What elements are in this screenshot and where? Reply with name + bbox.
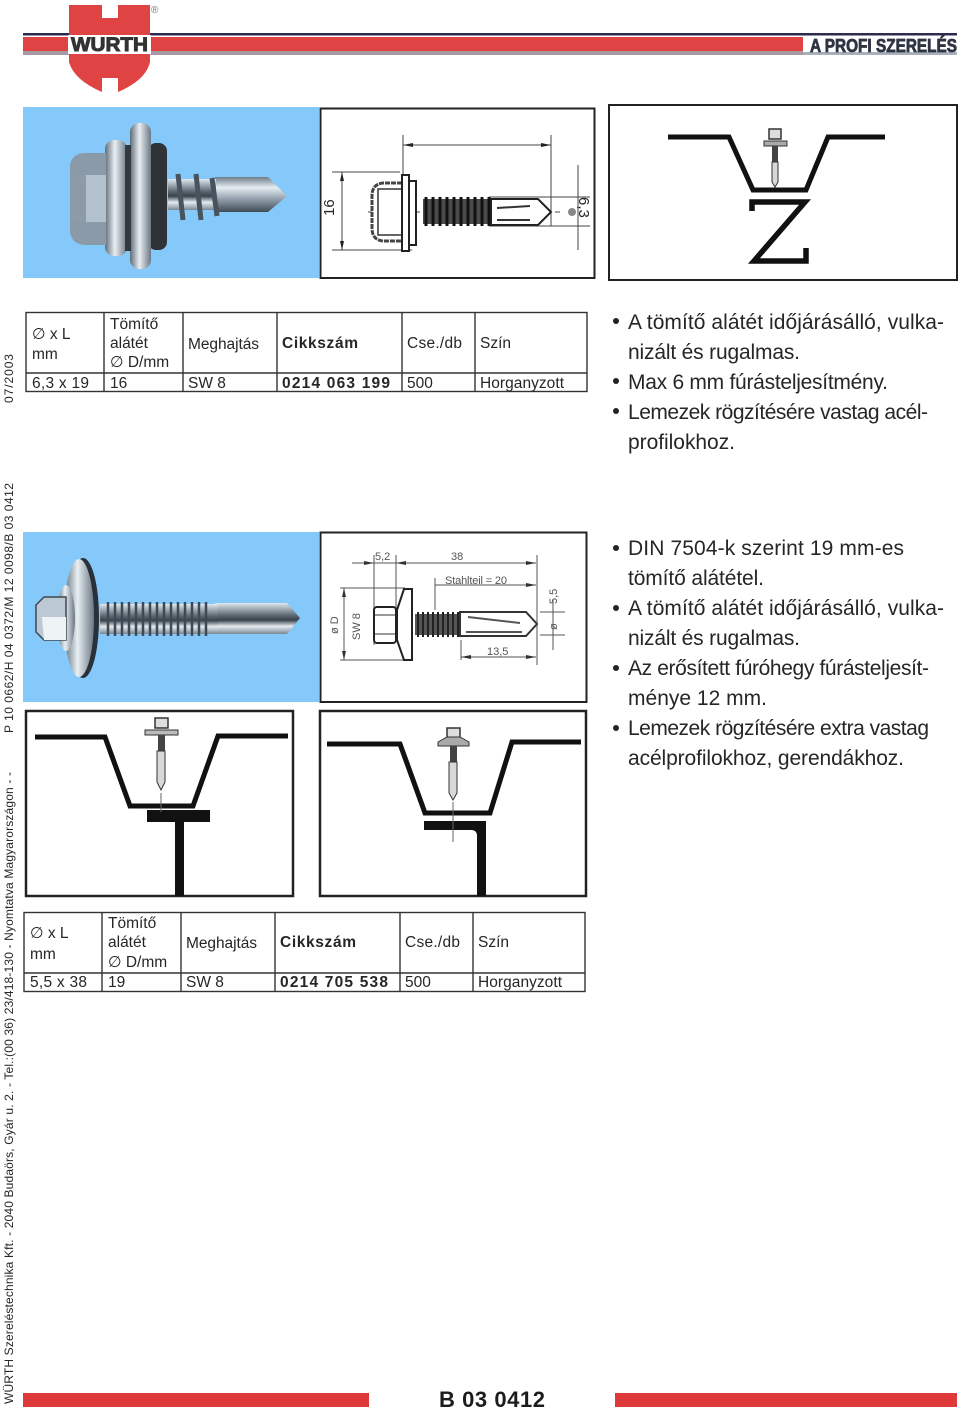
thread: [100, 602, 218, 636]
table 1: Tömítő: [110, 316, 158, 333]
header band: [23, 33, 957, 56]
drill tip: [460, 612, 537, 636]
diagram: T profile mounting: [26, 711, 293, 896]
label: 6,3: 6,3: [575, 197, 592, 218]
bullet list 2: ménye 12 mm.: [628, 687, 767, 710]
logo: Würth shield: WURTH: [71, 35, 148, 56]
table 1: ∅ D/mm: [110, 353, 169, 371]
diagram: L profile mounting: [320, 711, 586, 896]
bullet list 2: A tömítő alátét időjárásálló, vulka-: [628, 597, 944, 620]
head: [374, 607, 396, 643]
bullet list 1: nizált és rugalmas.: [628, 341, 800, 364]
small screw: [145, 718, 178, 812]
bullet list 2: Lemezek rögzítésére extra vastag: [628, 717, 929, 740]
table 1: Cse./db: [407, 335, 462, 352]
head outline: [372, 183, 402, 241]
bullet list 1: profilokhoz.: [628, 431, 735, 454]
table 2: Szín: [478, 934, 509, 951]
bullet list 1: A tömítő alátét időjárásálló, vulka-: [628, 311, 944, 334]
drill shank: [215, 603, 300, 634]
table 2: Horganyzott: [478, 974, 563, 991]
footer: [23, 1387, 957, 1412]
technical drawing: screw 1 dimensions: [320, 108, 594, 278]
dimension labels: Stahlteil = 20: [445, 575, 507, 587]
label: 16: 16: [321, 199, 338, 216]
logo: Würth shield: ®: [151, 5, 159, 16]
dimension labels: 5,5: [548, 589, 560, 604]
table 1: ∅ x L: [32, 325, 71, 343]
table 2: 19: [108, 974, 125, 991]
table 2: ∅ D/mm: [108, 953, 167, 971]
table 2: mm: [30, 946, 56, 963]
table 1: 0214 063 199: [282, 375, 390, 392]
table 2: SW 8: [186, 974, 224, 991]
bullet list 2: [613, 537, 944, 770]
table 1: SW 8: [188, 375, 226, 392]
sidebar vertical text: 07/2003: [2, 354, 16, 403]
washers: [402, 175, 409, 251]
rubber seal: [148, 143, 167, 250]
logo: Würth shield: [68, 5, 159, 92]
dimension labels: ø: [548, 623, 560, 630]
sidebar vertical text: [2, 354, 16, 1404]
sidebar vertical text: WÜRTH Szereléstechnika Kft. - 2040 Budaörs, Gyár u. 2. - Tel.:(00 36) 23/418-130 - Nyomtatva Magyarországon - -: [2, 772, 16, 1404]
photo: screw 2 on blue: [23, 532, 319, 702]
bullet list 1: Max 6 mm fúrásteljesítmény.: [628, 371, 888, 394]
washer: [397, 589, 412, 660]
dimension labels: 13,5: [487, 646, 508, 658]
table 1: 16: [110, 375, 127, 392]
table 2: alátét: [108, 934, 147, 951]
screw tip and shank: [215, 177, 287, 212]
dimension labels: 5,2: [375, 551, 390, 563]
drill tip: [491, 199, 551, 225]
collar: [57, 585, 75, 651]
table 1: Meghajtás: [188, 336, 259, 353]
table 2: 500: [405, 974, 431, 991]
technical drawing: screw 2 dimensions: [320, 532, 586, 702]
dimension labels: SW 8: [351, 613, 363, 640]
table 1: Szín: [480, 335, 511, 352]
bullet list 2: DIN 7504-k szerint 19 mm-es: [628, 537, 904, 560]
dimension labels: [329, 551, 560, 658]
table 1: alátét: [110, 335, 149, 352]
thread: [168, 174, 217, 220]
dimension labels: 38: [451, 551, 463, 563]
table 1: mm: [32, 346, 58, 363]
table 1: [26, 312, 587, 392]
page code: B 03 0412: [439, 1387, 545, 1412]
hex head: [70, 153, 106, 245]
table 2: [24, 912, 585, 992]
photo: screw 1 on blue: [23, 107, 319, 278]
hex head: [36, 597, 66, 640]
bullet list 2: Az erősített fúróhegy fúrásteljesít-: [628, 657, 929, 680]
table 1: 500: [407, 375, 433, 392]
bullet list 2: acélprofilokhoz, gerendákhoz.: [628, 747, 904, 770]
table 1: Horganyzott: [480, 375, 565, 392]
diagram: Z profile mounting: [609, 105, 957, 280]
thread: [423, 199, 491, 224]
lower washer: [105, 140, 127, 256]
table 2: ∅ x L: [30, 924, 69, 942]
table 2: 0214 705 538: [280, 974, 388, 991]
table 2: Cikkszám: [280, 934, 356, 951]
table 1: Cikkszám: [282, 335, 358, 352]
upper washer: [130, 123, 151, 269]
table 1: 6,3 x 19: [32, 375, 89, 392]
table 2: Tömítő: [108, 915, 156, 932]
bullet list 2: nizált és rugalmas.: [628, 627, 800, 650]
thread: [415, 614, 460, 635]
small screw: [438, 728, 469, 842]
sidebar vertical text: P 10 0662/H 04 0372/M 12 0098/B 03 0412: [2, 483, 16, 733]
washer: [67, 558, 99, 678]
dimension labels: ø D: [329, 616, 341, 634]
table 2: Meghajtás: [186, 935, 257, 952]
bullet list 2: tömítő alátétel.: [628, 567, 764, 590]
bullet list 1: Lemezek rögzítésére vastag acél-: [628, 401, 928, 424]
table 2: 5,5 x 38: [30, 974, 87, 991]
bullet list 1: [613, 311, 944, 454]
small screw: [764, 129, 787, 187]
table 2: Cse./db: [405, 934, 460, 951]
